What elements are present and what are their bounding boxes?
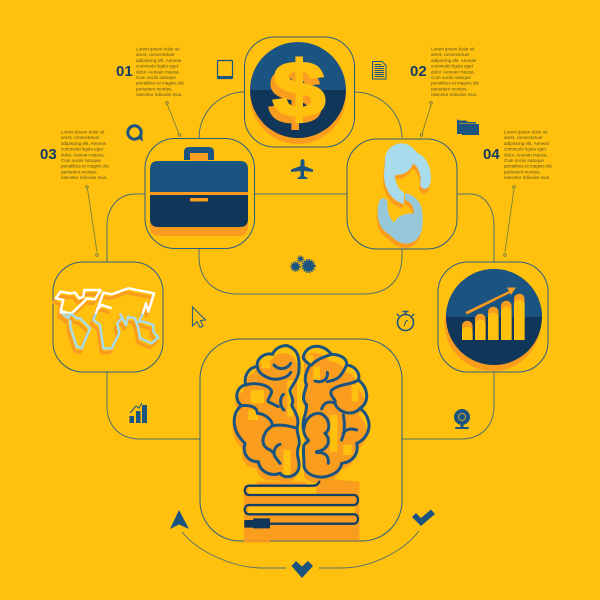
icon: navigation arrow: [170, 510, 189, 529]
text block 04: amet, consectetuer: [504, 135, 543, 140]
leader lines: [86, 102, 515, 256]
text block 03: [40, 130, 109, 180]
text block 04: 04: [483, 146, 500, 163]
text block 01: penatibus et magnis dis: [136, 81, 184, 86]
text block 04: commodo ligula eget: [504, 147, 547, 152]
text block 03: penatibus et magnis dis: [61, 164, 109, 169]
text block 02: nascetur ridiculus mus.: [431, 92, 478, 97]
text block 01: commodo ligula eget: [136, 64, 179, 69]
text block 03: Lorem ipsum dolor sit: [61, 130, 105, 134]
icon: speech magnifier: [128, 126, 143, 142]
text block 03: parturient montes,: [61, 169, 98, 174]
text block 04: parturient montes,: [504, 169, 541, 174]
text block 03: amet, consectetuer: [61, 135, 100, 140]
text block 02: Cum sociis natoque: [431, 75, 471, 80]
icon: folder: [457, 119, 479, 135]
icon: tablet: [217, 60, 233, 78]
text block 02: penatibus et magnis dis: [431, 81, 479, 86]
text block 04: Cum sociis natoque: [504, 158, 544, 163]
icon: check mark: [412, 510, 435, 526]
text block 02: [410, 46, 479, 97]
icon: document: [372, 62, 386, 79]
panel: growth chart: [438, 262, 548, 372]
panel: brain: [200, 339, 402, 543]
text block 01: dolor. Aenean massa.: [136, 69, 180, 74]
text block 01: parturient montes,: [136, 86, 173, 91]
text block 04: penatibus et magnis dis: [504, 164, 552, 169]
icon: gears: [291, 256, 315, 272]
text block 01: nascetur ridiculus mus.: [136, 92, 182, 97]
panel: briefcase: [145, 138, 254, 248]
text block 03: commodo ligula eget: [61, 147, 104, 152]
text block 04: [483, 130, 552, 180]
text block 02: dolor. Aenean massa.: [431, 69, 475, 74]
text block 04: nascetur ridiculus mus.: [504, 175, 550, 180]
icon: plane: [291, 159, 313, 179]
panel: world map: [53, 262, 163, 372]
text block 03: dolor. Aenean massa.: [61, 152, 105, 157]
text block 04: adipiscing elit. Aenean: [504, 141, 550, 146]
text block 01: [116, 46, 184, 97]
icon: stopwatch: [397, 312, 414, 330]
icon: small bar chart: [130, 403, 147, 423]
text block 02: adipiscing elit. Aenean: [431, 58, 477, 63]
text block 02: commodo ligula eget: [431, 64, 474, 69]
panel: dollar: $: [272, 45, 326, 133]
panel: chain link: [347, 139, 457, 249]
text block 02: parturient montes,: [431, 86, 468, 91]
text block 03: Cum sociis natoque: [61, 158, 101, 163]
text block 02: 02: [410, 63, 427, 80]
text block 03: nascetur ridiculus mus.: [61, 175, 108, 180]
text block 03: 03: [40, 146, 57, 163]
text block 01: Lorem ipsum dolor sit: [136, 46, 180, 52]
text block 04: Lorem ipsum dolor sit: [504, 130, 548, 134]
text block 01: amet, consectetuer: [136, 52, 175, 57]
text block 01: adipiscing elit. Aenean: [136, 58, 182, 63]
text block 02: amet, consectetuer: [431, 52, 470, 57]
text block 04: dolor. Aenean massa.: [504, 152, 548, 157]
text block 01: Cum sociis natoque: [136, 75, 176, 80]
bottom arc connectors: [182, 531, 419, 568]
connector lines: [107, 92, 494, 439]
panel: dollar: $: [268, 52, 322, 140]
text block 01: 01: [116, 63, 133, 80]
icon: handshake heart: [292, 561, 313, 578]
icon: webcam: [454, 409, 470, 429]
icon: cursor: [192, 307, 206, 328]
panel: dollar: [244, 37, 354, 147]
text block 03: adipiscing elit. Aenean: [61, 141, 107, 146]
text block 02: Lorem ipsum dolor sit: [431, 46, 475, 52]
